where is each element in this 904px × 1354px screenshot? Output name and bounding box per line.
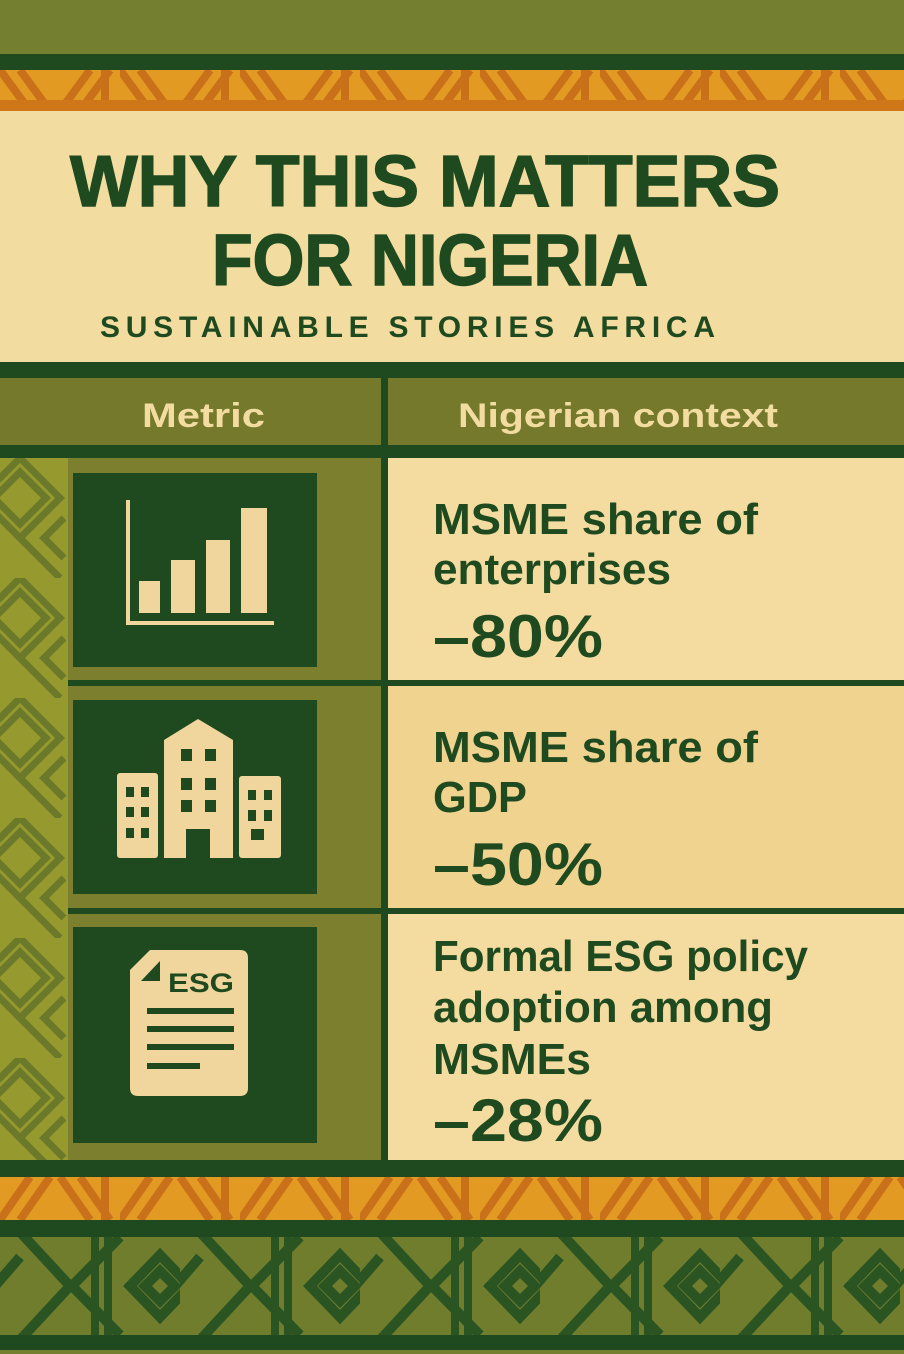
row 3 text: MSMEs <box>433 1035 591 1084</box>
table body background <box>0 458 904 1160</box>
row 2 text: GDP <box>433 773 527 822</box>
row 3 text: Formal ESG policy <box>433 932 808 981</box>
table header: Metric <box>142 397 265 435</box>
row 3 text: adoption among <box>433 983 773 1032</box>
row 3 text: –28% <box>433 1087 603 1154</box>
row 2 text: –50% <box>433 831 603 898</box>
row 1 text: enterprises <box>433 545 671 594</box>
row 1 text: MSME share of <box>433 495 758 544</box>
row 1 text <box>433 495 758 670</box>
title: WHY THIS MATTERS <box>70 142 780 222</box>
bottom band <box>0 1160 904 1354</box>
icon: ESG document: ESG <box>168 968 234 998</box>
row 3 text <box>433 932 808 1154</box>
row 2 text <box>433 723 758 898</box>
icon: buildings <box>73 700 317 894</box>
icon: bar chart <box>73 473 317 667</box>
title: FOR NIGERIA <box>212 221 648 301</box>
row 1 text: –80% <box>433 603 603 670</box>
top band <box>0 0 904 111</box>
table header <box>0 362 904 458</box>
icon: ESG document <box>73 927 317 1143</box>
table header: Nigerian context <box>458 397 778 435</box>
title <box>70 142 780 301</box>
row 2 text: MSME share of <box>433 723 758 772</box>
subtitle: SUSTAINABLE STORIES AFRICA <box>100 311 715 344</box>
